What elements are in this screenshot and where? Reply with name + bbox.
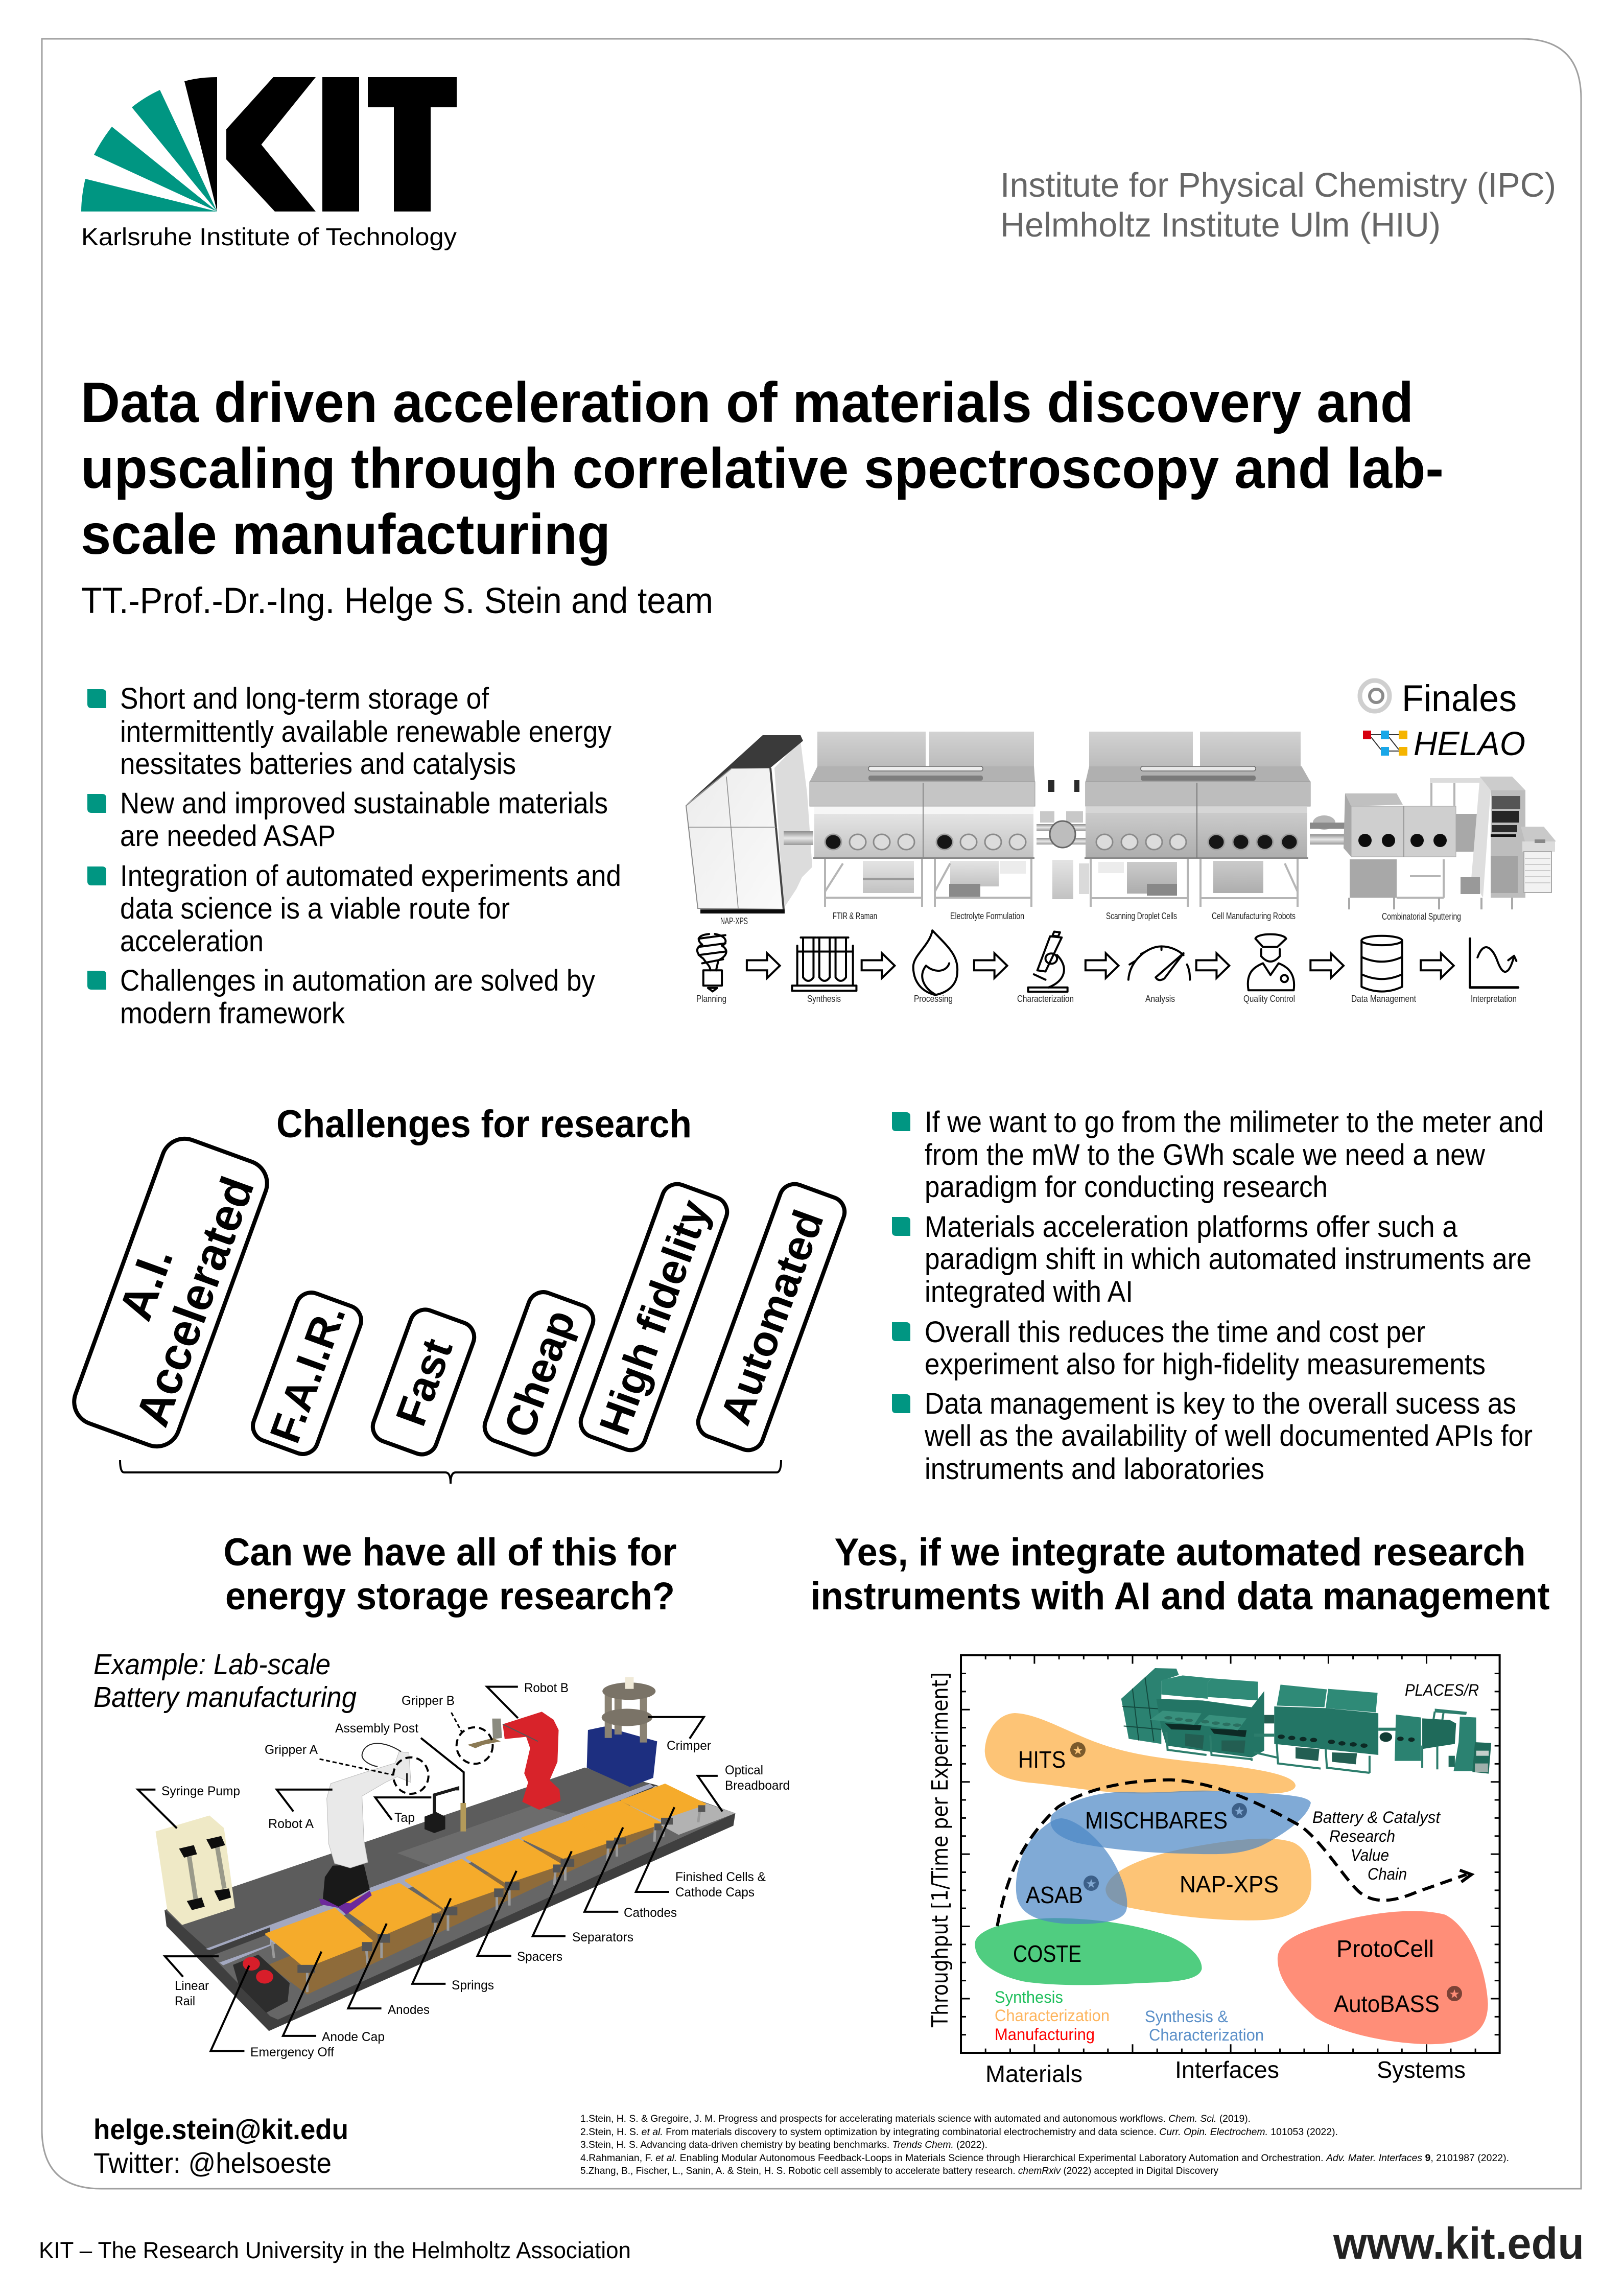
- right bullet list: paradigm shift in which automated instruments are: [925, 1243, 1532, 1276]
- right bullet list: experiment also for high-fidelity measurements: [925, 1348, 1486, 1381]
- italic annotations: [1312, 1681, 1479, 1883]
- workflow step labels: Synthesis: [807, 994, 841, 1004]
- right bullet list: Overall this reduces the time and cost per: [925, 1316, 1425, 1349]
- references: [580, 2114, 1509, 2176]
- heading: yes if we integrate: instruments with AI and data management: [810, 1575, 1550, 1618]
- references: 4.Rahmanian, F. et al. Enabling Modular Autonomous Feedback-Loops in Materials Science through Hierarchical Experimental Laboratory Automation and Orchestration. Adv. Mater. Interfaces 9, 2101987 (2022).: [580, 2153, 1509, 2164]
- chart legend: [995, 1988, 1264, 2044]
- battery callout labels: [161, 1681, 790, 2059]
- author line: TT.-Prof.-Dr.-Ing. Helge S. Stein and team: [81, 581, 713, 621]
- laboratory instruments illustration: [686, 732, 1556, 913]
- NAP-XPS cabinet: [686, 735, 813, 913]
- right bullet list: integrated with AI: [925, 1275, 1133, 1308]
- left bullet list: Integration of automated experiments and: [120, 859, 621, 893]
- battery callout labels: Syringe Pump: [161, 1784, 240, 1798]
- title: upscaling through correlative spectroscopy and lab-: [81, 437, 1444, 500]
- workflow icon: gauge: [1128, 946, 1190, 980]
- workflow icon: flame: [913, 930, 957, 995]
- italic annotations: PLACES/R: [1405, 1681, 1479, 1699]
- workflow icon: test tubes: [792, 938, 856, 991]
- pill: High fidelity: High fidelity: [590, 1193, 719, 1441]
- example caption: Example: Lab-scale: [93, 1648, 331, 1681]
- left bullet list: Short and long-term storage of: [120, 682, 489, 715]
- blob labels: MISCHBARES: [1085, 1807, 1228, 1834]
- blob labels: ASAB: [1026, 1882, 1083, 1908]
- curly brace: [120, 1460, 781, 1484]
- battery callout labels: Robot B: [524, 1681, 569, 1695]
- references: 5.Zhang, B., Fischer, L., Sanin, A. & Stein, H. S. Robotic cell assembly to accelerate battery research. chemRxiv (2022) accepted in Digital Discovery: [580, 2166, 1218, 2176]
- battery callout labels: Anodes: [388, 2003, 430, 2017]
- workflow arrows: [747, 953, 1454, 978]
- battery callout labels: Tap: [394, 1811, 415, 1825]
- institute names: Institute for Physical Chemistry (IPC): [1000, 166, 1556, 204]
- footer website: www.kit.edu: [1333, 2219, 1584, 2268]
- instrument labels: Combinatorial Sputtering: [1382, 911, 1461, 922]
- tray legs: [272, 1808, 700, 1992]
- right bullet list: Materials acceleration platforms offer such a: [925, 1210, 1458, 1244]
- workflow step labels: Analysis: [1145, 994, 1175, 1004]
- right bullet list: well as the availability of well documented APIs for: [924, 1419, 1533, 1452]
- left bullet list: modern framework: [120, 997, 345, 1030]
- battery callout labels: Gripper A: [265, 1743, 318, 1757]
- heading: yes if we integrate: Yes, if we integrate automated research: [835, 1531, 1525, 1574]
- institute names: [1000, 166, 1556, 244]
- chart legend: Synthesis: [995, 1988, 1063, 2006]
- x axis categories: Systems: [1377, 2056, 1466, 2083]
- example caption: Battery manufacturing: [93, 1681, 357, 1714]
- right bullet list: [892, 1106, 1544, 1486]
- orange trays: [266, 1785, 705, 1967]
- institute names: Helmholtz Institute Ulm (HIU): [1000, 206, 1441, 244]
- pill: A.I. Accelerated: [68, 1132, 273, 1453]
- title: [81, 371, 1444, 566]
- right bullet list: If we want to go from the milimeter to the meter and: [925, 1106, 1544, 1139]
- pill: A.I. Accelerated: Accelerated: [126, 1170, 264, 1433]
- x axis categories: Interfaces: [1175, 2056, 1279, 2083]
- blob: NAP-XPS: [1105, 1839, 1311, 1920]
- battery callout labels: Rail: [175, 1994, 195, 2008]
- glovebox pair left: [810, 732, 1035, 907]
- heading: can we have all of this: Can we have all of this for: [224, 1531, 676, 1574]
- HELAO logo: [1363, 724, 1525, 762]
- title: Data driven acceleration of materials discovery and: [81, 371, 1414, 434]
- example caption: [93, 1648, 357, 1714]
- contact details: helge.stein@kit.edu: [93, 2113, 348, 2145]
- pill: Automated: Automated: [711, 1204, 833, 1431]
- workflow icon: light bulb: [697, 934, 726, 992]
- left bullet list: intermittently available renewable energy: [120, 715, 611, 748]
- references: 3.Stein, H. S. Advancing data-driven chemistry by beating benchmarks. Trends Chem. (2022).: [580, 2140, 987, 2150]
- workflow step labels: Planning: [696, 994, 726, 1004]
- x axis categories: [985, 2056, 1466, 2087]
- italic annotations: Research: [1329, 1827, 1395, 1845]
- title: scale manufacturing: [81, 503, 610, 566]
- blob: ASAB: [1016, 1818, 1127, 1924]
- robot A: [319, 1743, 411, 1915]
- left bullet list: New and improved sustainable materials: [120, 787, 608, 820]
- battery callout labels: Finished Cells &: [675, 1870, 766, 1884]
- battery callout labels: Crimper: [667, 1739, 711, 1753]
- heading: yes if we integrate: [810, 1531, 1550, 1618]
- blob labels: HITS: [1018, 1746, 1066, 1773]
- italic annotations: Value: [1351, 1846, 1389, 1864]
- blob labels: AutoBASS: [1334, 1990, 1440, 2017]
- instrument labels: Cell Manufacturing Robots: [1212, 911, 1296, 921]
- pipes to sputtering: [1310, 815, 1350, 845]
- battery callout labels: Spacers: [517, 1950, 562, 1964]
- left bullet list: acceleration: [120, 925, 264, 958]
- chart frame and blobs: [961, 1655, 1500, 2053]
- glovebox pair right: [1085, 732, 1310, 907]
- star badges: ★: [1449, 1987, 1460, 2001]
- blob: MISCHBARES: [1050, 1791, 1311, 1854]
- instrument labels: [720, 911, 1461, 926]
- heading: can we have all of this: energy storage research?: [225, 1575, 675, 1618]
- connecting section with filters: [1037, 780, 1089, 899]
- pill: Automated: [694, 1180, 849, 1455]
- workflow step labels: Quality Control: [1243, 994, 1295, 1004]
- y axis label: Throughput [1/Time per Experiment]: [927, 1672, 953, 2028]
- Finales logo: Finales: [1402, 678, 1517, 719]
- KIT logo: Karlsruhe Institute of Technology: [81, 224, 457, 251]
- workflow icon: database: [1361, 936, 1402, 992]
- references: 2.Stein, H. S. et al. From materials discovery to system optimization by integrating combinatorial electrochemistry and data science. Curr. Opin. Electrochem. 101053 (2022).: [580, 2127, 1338, 2138]
- star badges: ★: [1234, 1804, 1245, 1818]
- left bullet list: [87, 682, 621, 1030]
- platform base: [164, 1768, 735, 2031]
- star badges: ★: [1072, 1743, 1084, 1758]
- heading: challenges for research: Challenges for research: [276, 1103, 692, 1146]
- HELAO logo: HELAO: [1414, 724, 1525, 762]
- crimper: [587, 1677, 657, 1787]
- instrument labels: FTIR & Raman: [833, 911, 877, 921]
- chart legend: Synthesis &: [1145, 2007, 1228, 2026]
- battery callout labels: Separators: [572, 1930, 633, 1944]
- battery callout labels: Cathodes: [624, 1906, 677, 1920]
- syringe pump: [155, 1815, 235, 1925]
- right bullet list: Data management is key to the overall sucess as: [925, 1387, 1516, 1420]
- x axis categories: Materials: [985, 2060, 1082, 2087]
- blob labels: COSTE: [1013, 1940, 1081, 1967]
- battery callout labels: Cathode Caps: [675, 1885, 755, 1900]
- PLACES/R instrument silhouette: [1121, 1668, 1491, 1774]
- battery callout labels: Gripper B: [402, 1694, 455, 1708]
- pill: Cheap: Cheap: [495, 1304, 584, 1443]
- battery callout labels: Linear: [175, 1979, 209, 1993]
- blob labels: NAP-XPS: [1180, 1871, 1279, 1897]
- italic annotations: Battery & Catalyst: [1312, 1808, 1441, 1826]
- star badges: [1070, 1742, 1462, 2001]
- battery callout labels: Anode Cap: [322, 2030, 385, 2044]
- heading: can we have all of this: [224, 1531, 676, 1618]
- workflow icons and arrows: [697, 930, 1518, 995]
- tap and assembly post: [425, 1788, 466, 1833]
- callout lines: [138, 1686, 722, 2051]
- blob: HITS: [985, 1713, 1296, 1794]
- chart legend: Characterization: [995, 2006, 1110, 2025]
- workflow step labels: Data Management: [1351, 994, 1416, 1004]
- footer tagline: KIT – The Research University in the Helmholtz Association: [39, 2237, 631, 2263]
- battery callout labels: Robot A: [268, 1817, 314, 1831]
- left bullet list: nessitates batteries and catalysis: [120, 747, 516, 781]
- left bullet list: Challenges in automation are solved by: [120, 964, 595, 997]
- tray brackets: [297, 1805, 705, 1973]
- throughput chart: [927, 1655, 1500, 2087]
- blob labels: ProtoCell: [1336, 1935, 1434, 1962]
- battery callout labels: Emergency Off: [250, 2045, 334, 2059]
- star badges: ★: [1086, 1877, 1097, 1891]
- right bullet list: from the mW to the GWh scale we need a new: [925, 1138, 1486, 1172]
- workflow icon: interpretation graph: [1470, 939, 1518, 988]
- pill: Fast: [368, 1305, 479, 1459]
- left bullet list: are needed ASAP: [120, 819, 336, 853]
- contact details: [93, 2113, 348, 2179]
- emergency stop box: [233, 1955, 290, 2013]
- battery manufacturing robot illustration: [138, 1677, 735, 2051]
- battery callout labels: Springs: [452, 1978, 494, 1993]
- workflow icon: microscope: [1028, 931, 1068, 992]
- contact details: Twitter: @helsoeste: [93, 2147, 332, 2179]
- challenge pills: [68, 1132, 849, 1459]
- platform and assembly line: [155, 1677, 735, 2031]
- pill: A.I. Accelerated: A.I.: [109, 1240, 183, 1327]
- battery callout labels: Breadboard: [725, 1778, 790, 1793]
- italic annotations: Chain: [1368, 1865, 1407, 1883]
- chart legend: Characterization: [1149, 2026, 1264, 2044]
- right bullet list: instruments and laboratories: [925, 1452, 1264, 1486]
- workflow step labels: Processing: [914, 994, 953, 1004]
- blob: ProtoCell and AutoBASS: [1278, 1911, 1488, 2044]
- pill: Cheap: [480, 1288, 598, 1459]
- workflow step labels: Interpretation: [1471, 994, 1517, 1004]
- blob labels: [1013, 1746, 1440, 2017]
- battery callout labels: Optical: [725, 1763, 763, 1777]
- KIT logo: [81, 77, 457, 251]
- sputtering system: [1344, 777, 1556, 909]
- workflow icon: quality control officer: [1248, 934, 1294, 990]
- instrument labels: NAP-XPS: [720, 916, 748, 926]
- instrument labels: Electrolyte Formulation: [950, 911, 1024, 921]
- chart legend: Manufacturing: [995, 2025, 1095, 2044]
- instrument labels: Scanning Droplet Cells: [1106, 911, 1177, 921]
- references: 1.Stein, H. S. & Gregoire, J. M. Progress and prospects for accelerating materials science with automated and autonomous workflows. Chem. Sci. (2019).: [580, 2114, 1251, 2124]
- right bullet list: paradigm for conducting research: [925, 1170, 1328, 1204]
- left bullet list: data science is a viable route for: [120, 892, 510, 925]
- blob: COSTE: [975, 1918, 1202, 1985]
- value chain dashed arrow: [997, 1780, 1472, 1926]
- battery callout labels: Assembly Post: [335, 1721, 418, 1736]
- workflow step labels: [696, 994, 1517, 1004]
- robot B: [467, 1712, 560, 1810]
- workflow step labels: Characterization: [1017, 994, 1074, 1004]
- pill: Fast: Fast: [386, 1332, 462, 1432]
- pill: F.A.I.R.: F.A.I.R.: [261, 1298, 355, 1449]
